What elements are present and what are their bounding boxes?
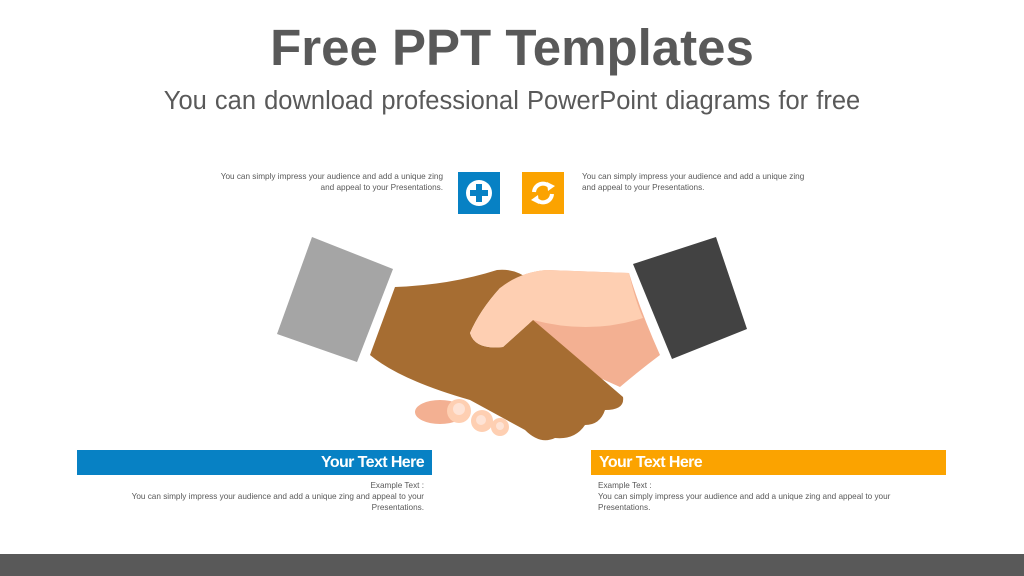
dark hand [370,270,623,440]
subtitle: You can download professional PowerPoint diagrams for free [164,87,860,115]
title: Free PPT Templates [270,19,754,76]
header bar: right: Your Text Here [599,454,702,471]
body text: left: Example Text : [370,481,424,490]
body text: left [132,481,424,512]
panel: left [77,450,432,512]
header bar: left [77,450,432,475]
text block: top right: You can simply impress your audience and add a unique zing and appeal to your Presentations. [582,172,804,192]
right sleeve [633,237,747,359]
text block: top left: You can simply impress your audience and add a unique zing and appeal to your Presentations. [221,172,443,192]
header bar: left: Your Text Here [321,454,424,471]
body text: right [598,481,890,512]
left sleeve [277,237,393,362]
body text: left: You can simply impress your audience and add a unique zing and appeal to your Presentations. [132,492,424,512]
icon: refresh [522,172,564,214]
body text: right: You can simply impress your audience and add a unique zing and appeal to your Presentations. [598,492,890,512]
header bar: right [591,450,946,475]
body text: right: Example Text : [598,481,652,490]
panel: right [591,450,946,512]
fingertips [447,399,509,436]
footer bar [0,554,1024,576]
icon: plus [458,172,500,214]
light hand [415,270,660,424]
